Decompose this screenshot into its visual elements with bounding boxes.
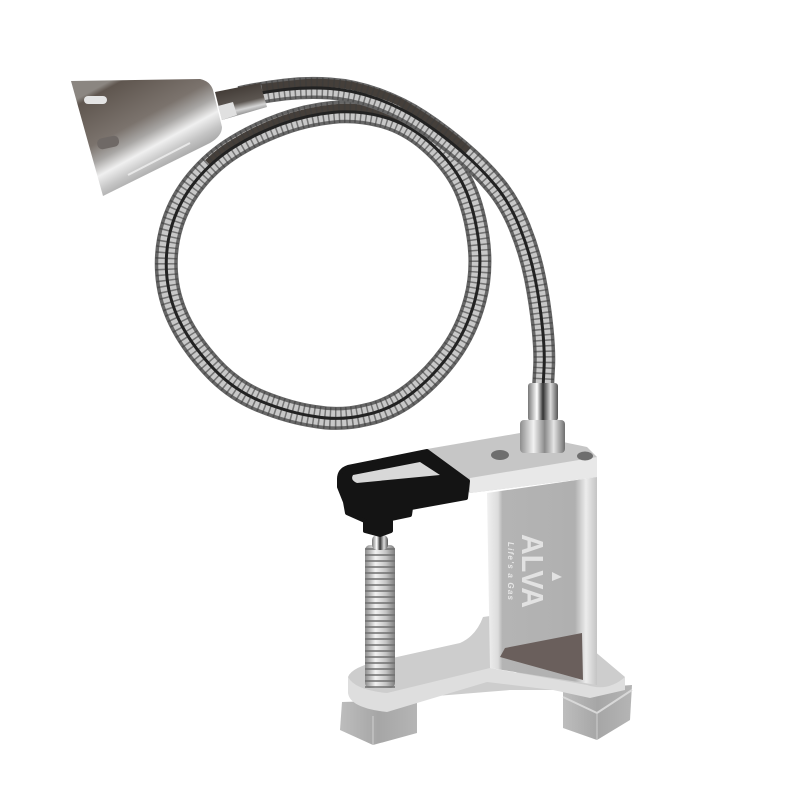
swivel neck on base — [520, 383, 565, 453]
clamp base front edge — [348, 668, 625, 712]
logo text: ALVA — [515, 534, 550, 608]
clamp top plate — [427, 433, 597, 493]
logo text: Life's a Gas — [506, 542, 515, 601]
shade slot upper — [84, 96, 107, 104]
logo text — [506, 534, 562, 608]
knob window — [352, 462, 440, 483]
clamp base plate top surface — [348, 616, 625, 700]
clamp column — [487, 477, 597, 685]
shade slot lower — [96, 135, 120, 150]
left foot nut — [340, 700, 417, 745]
gooseneck hose — [166, 83, 544, 418]
hose main strand — [240, 83, 544, 388]
right foot nut — [563, 685, 632, 740]
hose loop strand — [166, 108, 480, 418]
lamp collar — [215, 83, 267, 120]
black rubber knob — [339, 451, 468, 535]
threaded screw — [365, 535, 395, 688]
dark reflection — [500, 633, 583, 680]
lamp shade — [71, 79, 222, 196]
